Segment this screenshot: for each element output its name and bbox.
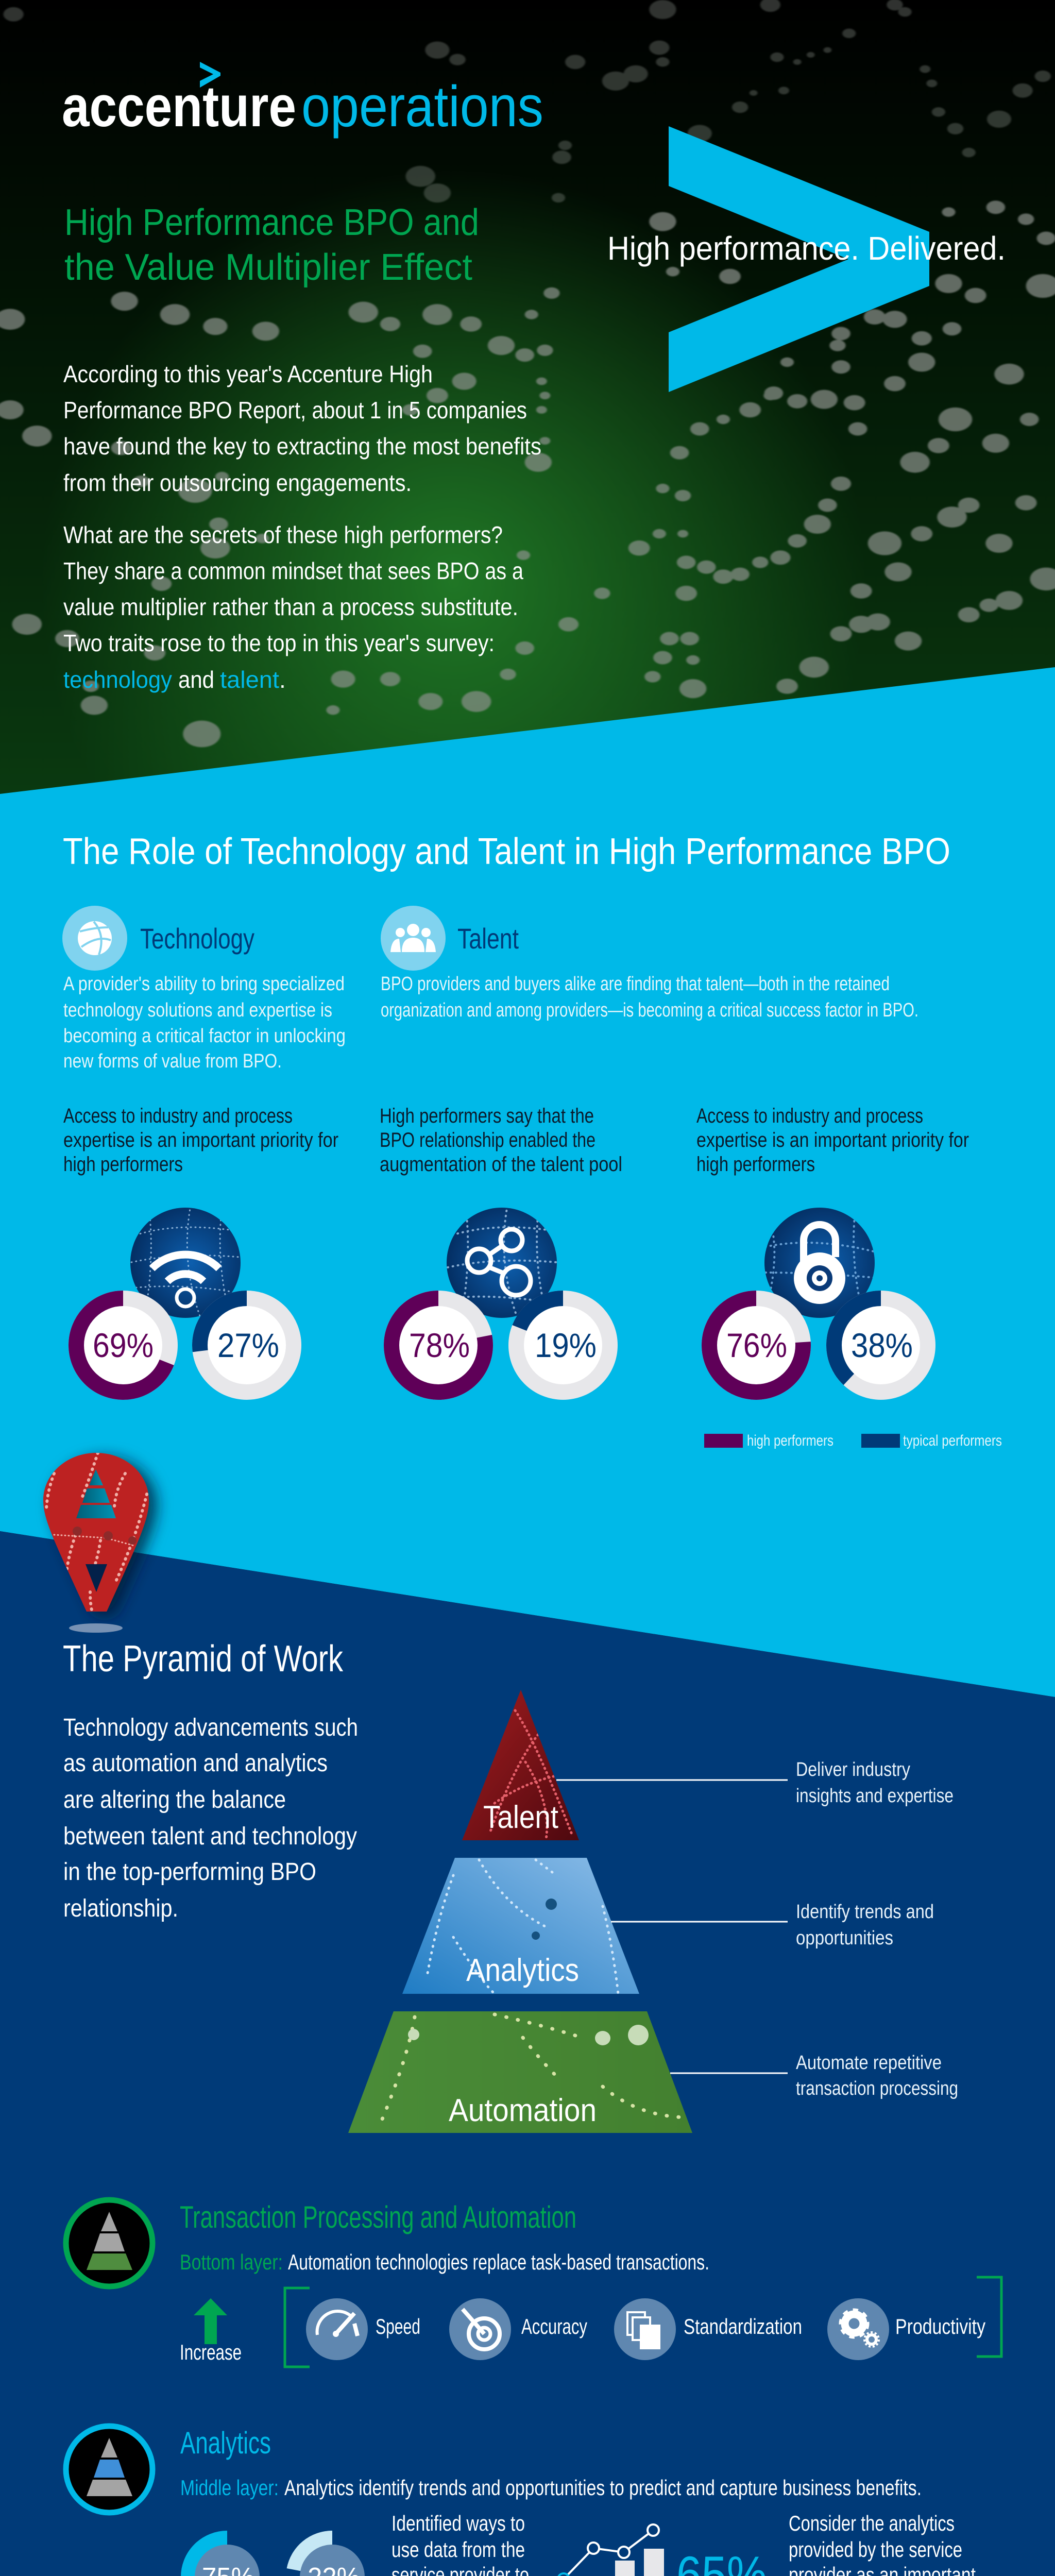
bar and line chart — [556, 2524, 664, 2576]
pyramid layer: automation — [348, 2011, 692, 2133]
text: identified ways — [392, 2511, 529, 2576]
pyramid layer: talent — [462, 1690, 579, 1840]
text: technology description: A provider's ability to bring specialized — [63, 973, 345, 995]
pyramid labels — [796, 1759, 958, 2099]
heading: pyramid of work: The Pyramid of Work — [63, 1638, 344, 1680]
heading: High Performance BPO — [64, 202, 479, 288]
logo: accenture operations: accenture — [62, 74, 296, 139]
donut: typical performers 38% — [834, 1298, 928, 1392]
text: priority statement — [696, 1105, 969, 1176]
text: pyramid intro: between talent and technology — [63, 1823, 357, 1850]
text: talent pool statement: augmentation of the talent pool — [380, 1153, 622, 1176]
intro text: What are the secrets of these high performers? — [63, 521, 503, 548]
pyramid layer: analytics — [402, 1858, 639, 1994]
donut: high performers 69%: 69% — [93, 1326, 154, 1364]
icon: increase arrow: Increase — [180, 2340, 242, 2364]
benefit: standardization: Standardization — [684, 2314, 802, 2338]
text: identified ways: use data from the — [392, 2537, 525, 2562]
donut: typical performers 19%: 19% — [535, 1326, 597, 1364]
text: priority statement: high performers — [63, 1153, 183, 1176]
text: identified ways: Identified ways to — [392, 2511, 525, 2535]
pyramid labels: insights and expertise — [796, 1785, 954, 1807]
donut: high performers 76% — [709, 1298, 803, 1392]
intro text: talent — [220, 666, 279, 693]
donut: 75% high performers — [188, 2538, 266, 2576]
technology block — [62, 906, 346, 1072]
text: pyramid intro: as automation and analytics — [63, 1750, 328, 1777]
donut: typical performers 19% — [516, 1298, 610, 1392]
icon: padlock on web texture — [764, 1208, 876, 1318]
intro text: from their outsourcing engagements. — [63, 469, 412, 496]
pyramid layer: talent: Talent — [483, 1800, 558, 1835]
benefit: speed: Speed — [376, 2314, 420, 2338]
pyramid layer: automation: Automation — [449, 2093, 597, 2128]
heading: High Performance BPO: High Performance BPO and — [64, 202, 479, 243]
donut: high performers 76%: 76% — [726, 1326, 787, 1364]
map pin: pyramid — [43, 1453, 149, 1633]
pyramid labels: Automate repetitive — [796, 2052, 942, 2074]
legend — [704, 1432, 1002, 1449]
tagline: High performance. Delivered. — [607, 230, 1006, 267]
text: technology description: technology solutions and expertise is — [63, 999, 332, 1021]
pyramid layer: analytics: Analytics — [466, 1953, 579, 1988]
intro text — [63, 361, 541, 693]
text: consider the analytics: Consider the analytics — [789, 2511, 955, 2535]
intro text: technology — [63, 666, 172, 693]
text: priority statement: expertise is an important priority for — [696, 1129, 969, 1151]
intro text: They share a common mindset that sees BPO as a — [63, 557, 523, 584]
text: technology description — [63, 973, 346, 1072]
stat column 1: wifi — [63, 1105, 338, 1392]
icon: people — [381, 906, 446, 971]
intro text: According to this year's Accenture High — [63, 361, 433, 387]
text: pyramid intro — [63, 1714, 358, 1922]
heading: High Performance BPO: the Value Multiplier Effect — [64, 247, 472, 288]
panel background: technology and talent — [0, 667, 1055, 1697]
icon: increase arrow — [180, 2298, 242, 2364]
text: talent pool statement — [380, 1105, 622, 1176]
text: technology description: new forms of value from BPO. — [63, 1050, 282, 1072]
section heading: role of technology and talent: The Role of Technology and Talent in High Performance BPO — [63, 831, 950, 872]
heading: talent: Talent — [457, 922, 519, 955]
benefit: speed — [306, 2298, 420, 2360]
hero background — [0, 0, 1055, 804]
donut: typical performers 27% — [200, 1298, 294, 1392]
heading: technology: Technology — [140, 922, 254, 955]
text: bottom layer: Bottom layer: — [180, 2250, 283, 2274]
text: priority statement: Access to industry and process — [63, 1105, 293, 1127]
text: talent pool statement: High performers say that the — [380, 1105, 594, 1127]
text: talent description: BPO providers and buyers alike are finding that talent—both in the retained — [381, 973, 890, 995]
benefit: accuracy: Accuracy — [521, 2314, 587, 2338]
accenture chevron — [669, 126, 929, 392]
legend: high performers — [747, 1432, 833, 1449]
text: priority statement: expertise is an important priority for — [63, 1129, 338, 1151]
text: bottom layer: Automation technologies replace task-based transactions. — [288, 2250, 709, 2274]
text: middle layer: Analytics identify trends and opportunities to predict and capture business benefits. — [284, 2476, 922, 2500]
stat column 3: padlock — [696, 1105, 969, 1392]
panel background: pyramid of work — [0, 1531, 1055, 2576]
benefit: productivity — [827, 2298, 985, 2360]
talent block — [381, 906, 918, 1021]
text: priority statement: high performers — [696, 1153, 815, 1176]
donut: high performers 78%: 78% — [409, 1326, 470, 1364]
connector lines — [556, 1780, 788, 2073]
pyramid labels: transaction processing — [796, 2078, 958, 2099]
logo: accenture operations: operations — [301, 74, 543, 139]
intro text: value multiplier rather than a process substitute. — [63, 594, 518, 620]
donut: typical performers 27%: 27% — [217, 1326, 279, 1364]
text: middle layer: Middle layer: — [180, 2476, 279, 2500]
panel: analytics — [66, 2426, 976, 2576]
legend: typical performers — [903, 1432, 1002, 1449]
intro text: Two traits rose to the top in this year's survey: — [63, 630, 495, 656]
donut: high performers 69% — [76, 1298, 170, 1392]
text: priority statement: Access to industry and process — [696, 1105, 923, 1127]
intro text: have found the key to extracting the most benefits — [63, 433, 541, 460]
text: priority statement — [63, 1105, 338, 1176]
donut: high performers 78% — [392, 1298, 485, 1392]
text: consider the analytics: provided by the service — [789, 2537, 962, 2562]
icon: globe — [62, 906, 127, 971]
panel: transaction processing and automation — [66, 2200, 1001, 2367]
heading: transaction processing: Transaction Processing and Automation — [180, 2200, 576, 2234]
text: technology description: becoming a critical factor in unlocking — [63, 1025, 346, 1047]
text: talent pool statement: BPO relationship enabled the — [380, 1129, 595, 1151]
intro text: . — [279, 666, 286, 693]
text: pyramid intro: in the top-performing BPO — [63, 1858, 316, 1886]
benefit: accuracy — [449, 2298, 587, 2360]
intro text: Performance BPO Report, about 1 in 5 companies — [63, 397, 527, 423]
donut: typical performers 38%: 38% — [851, 1326, 913, 1364]
heading: analytics: Analytics — [180, 2426, 271, 2460]
icon: pyramid middle layer highlighted — [66, 2426, 152, 2513]
bracket left and right — [285, 2277, 1001, 2367]
text: pyramid intro: are altering the balance — [63, 1786, 286, 1814]
icon: pyramid bottom layer highlighted — [66, 2200, 152, 2286]
icon: network on web texture — [447, 1206, 557, 1319]
intro text: and — [178, 666, 214, 693]
icon: wifi on web texture — [130, 1206, 241, 1319]
donut: 22% typical performers — [293, 2538, 371, 2576]
text: talent description — [381, 973, 918, 1021]
pyramid diagram — [348, 1690, 958, 2133]
text: consider the analytics — [789, 2511, 976, 2576]
pyramid labels: opportunities — [796, 1927, 893, 1949]
logo: accenture operations — [62, 62, 543, 139]
benefit: productivity: Productivity — [895, 2314, 985, 2338]
pyramid labels: Identify trends and — [796, 1901, 934, 1923]
stat column 2: network — [380, 1105, 622, 1392]
text: bottom layer — [180, 2250, 709, 2274]
text: pyramid intro: Technology advancements such — [63, 1714, 358, 1741]
text: pyramid intro: relationship. — [63, 1895, 178, 1922]
benefit: standardization — [614, 2298, 802, 2360]
pyramid labels: Deliver industry — [796, 1759, 910, 1781]
